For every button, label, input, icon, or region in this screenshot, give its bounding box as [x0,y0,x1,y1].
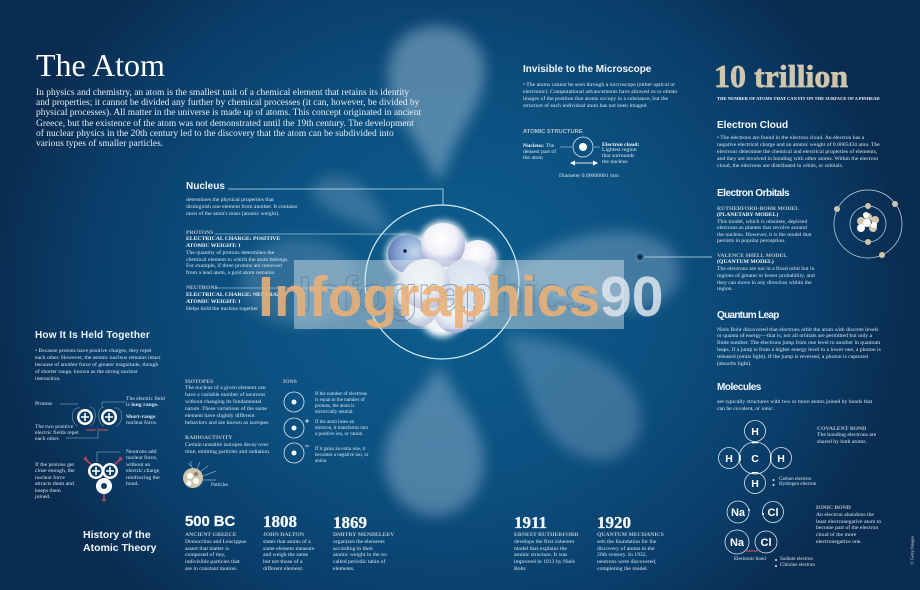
intro text: In physics and chemistry, an atom is the smallest unit of a chemical element that retains its identity [36,88,409,98]
label: neutrons add force: reinforcing the [126,475,160,481]
text: electron cloud: electrons determine the chemical and electrical properties of elements, [717,149,877,155]
description: develops the first coherent [514,539,574,545]
text: neutral atom: If the number of electrons [315,392,367,397]
text: covalent bond [817,426,876,445]
legend: ionic: Chlorine electron [780,563,815,568]
ionic bond diagram: Na [731,507,746,519]
text: invisible to the microscope [523,82,677,109]
electron orbitals diagram [834,190,902,258]
description: composed of tiny, [185,552,226,558]
text: neutrons: NEUTRONS [186,284,218,290]
heading: history: Atomic Theory [83,542,157,554]
description: completing the model. [597,566,648,572]
text: radioactivity: time, emitting particles and radiation. [185,448,270,454]
electron cloud lobes [242,26,680,516]
text: protons: ELECTRICAL CHARGE: POSITIVE [186,236,280,242]
description: ANCIENT GREECE [185,532,237,538]
label: nucleus: Nucleus: The [523,142,554,148]
text: molecules [717,399,872,412]
description: ERNEST RUTHERFORD [514,532,579,538]
heading: ions: IONS [283,378,297,384]
description [185,532,246,572]
label: electron cloud: that surrounds [602,153,634,159]
year: 1920 [597,513,631,532]
text: ionic bond: An electron abandons the [816,512,874,518]
label: particles: Particles [211,482,228,488]
intro text [36,88,422,149]
label: attraction [34,462,75,500]
text: isotopes: nature. These variations of the same [185,406,267,412]
description [597,532,664,572]
label: diameter: Diameter 0.00000001 mm [559,172,619,178]
label: repulsion: each other. [35,436,60,442]
methane covalent bond diagram: H [751,478,759,490]
ion diagrams [284,392,309,463]
legend: covalent [779,476,816,486]
label: neutrons add force: nuclear force, [126,455,157,461]
text: isotopes: The nucleus of a given element can [185,385,266,391]
text: nucleus: determines the physical properties that [186,196,274,202]
text: ionic bond: become part of the electron [816,525,878,531]
description: atomic structure. It was [514,552,567,558]
text: covalent bond: COVALENT BOND [817,426,866,432]
label: repulsion: electric fields repel [35,430,79,436]
year: 1808 [263,512,297,531]
text: molecules: are typically structures with two or more atoms joined by bonds that [717,399,872,405]
atomic structure diagram [560,137,600,166]
label: attraction: joined. [35,494,51,500]
text: neutrons: Helps hold the nucleus together [186,306,258,312]
label: nucleus [523,142,556,161]
label: nucleus: densest part of [523,149,556,155]
year: 1911 [514,513,547,532]
heading: atomic structure: ATOMIC STRUCTURE [523,128,583,134]
text: cation: electron, it transforms into [315,426,368,431]
description: but not those of a [263,559,302,565]
description: different element. [263,566,303,572]
text: ionic bond: least electronegative atom to [816,519,881,525]
heading: invisible to the microscope: Invisible to the Microscope [523,64,651,75]
text: planetary model: RUTHERFORD-BOHR MODEL [717,206,799,212]
methane covalent bond diagram [718,420,792,494]
text: anion [315,446,368,464]
description: states that atoms of a [263,539,311,545]
timeline: 1808 [263,512,314,572]
text: protons: The quantity of protons determines the [186,250,274,256]
text: protons [186,230,289,276]
text: isotopes: element have slightly different [185,413,255,419]
label: electron cloud: Electron cloud: [602,142,639,148]
heading: history [83,529,157,554]
label: electric field: The electric field [126,396,165,402]
text: protons: PROTONS [186,230,213,236]
text: radioactivity: Certain unstable isotopes decay over [185,442,268,448]
text: quantum model: they can move in any direction within the [717,280,812,286]
label: nucleus: the atom [523,155,543,161]
description: organizes the elements [333,539,385,545]
label: attraction: keeps them [35,488,61,494]
description [333,532,394,572]
description: and weigh the same [263,552,308,558]
text: how it is held together: because of another force of greater magnitude, though [35,362,158,368]
text: planetary model: electrons as planets that revolve around [717,225,807,231]
label: neutrons add force: electric charge, [126,468,161,474]
heading: electron cloud: Electron Cloud [717,120,788,131]
pointer dot [636,253,644,261]
text: electron cloud: negative electrical charge and an atomic weight of 0.0005434 amu. The [717,142,880,148]
label: attraction: nuclear force [35,475,65,481]
text: isotopes [185,378,270,426]
text: how it is held together: • Because protons have positive charges, they repel [35,348,152,354]
text: isotopes: have a variable number of neutrons [185,392,265,398]
text: protons: ATOMIC WEIGHT: 1 [186,243,241,249]
watermark text: Infographics90 [258,265,663,329]
label: short-range force: nuclear force. [126,420,157,426]
nucleus orbit circle [365,205,519,359]
description: improved in 1913 by Niels [514,559,575,565]
text: quantum leap: leaps. If a jump is from a higher energy level to a lower one, a photon is [717,347,881,353]
intro text: physical processes). All matter in the universe is made up of atoms. This concept originated in ancient [36,108,421,118]
description: discovery of atoms in the [597,546,654,552]
description [263,532,314,572]
big number caption: THE NUMBER OF ATOMS THAT CAN FIT ON THE SURFACE OF A PINHEAD [717,96,880,100]
text: invisible to the microscope: • The atoms cannot be seen through a microscope (either optical or [523,82,675,88]
label: repulsion [35,424,79,442]
text: neutral atom: is equal to the number of [315,398,365,403]
description: DMITRY MENDELEEV [333,532,394,538]
atomic nucleus [386,221,497,337]
label: neutrons add force: without an [126,462,150,468]
heading: nucleus: Nucleus [186,181,225,192]
text: quantum model: (QUANTUM MODEL) [717,259,774,265]
text: electron cloud [717,135,880,169]
text: anion: becomes a negative ion, or [315,453,368,458]
description: are in constant motion. [185,566,237,572]
text: anion: anion. [315,459,327,464]
methane covalent bond diagram: C [751,453,759,465]
text: isotopes: without changing its fundamental [185,399,261,405]
text: how it is held together [35,348,161,382]
text: how it is held together: of shorter range, known as the strong nuclear [35,368,138,374]
text: quantum leap: (absorbs light). [717,361,751,367]
description: according to their [333,546,373,552]
text: covalent bond: The bonding electrons are [817,432,876,438]
text: quantum model: The electrons are not in a fixed orbit but in [717,266,814,272]
text: how it is held together: interaction. [35,376,61,382]
legend: covalent: Carbon electron [779,476,811,482]
heading: history: History of the [83,529,151,541]
strong force diagram [83,452,123,502]
text: anion: If it gains an extra one, it [315,447,365,452]
methane covalent bond diagram: H [751,426,759,438]
text: planetary model [717,206,812,244]
label: attraction: If the protons get [35,462,74,468]
text: protons: chemical element to which the atom belongs. [186,256,289,262]
text: planetary model: This model, which is obsolete, depicted [717,219,807,225]
text: planetary model: persists in popular perception. [717,238,786,244]
proton repulsion diagram [60,402,126,438]
text: planetary model: the nucleus. However, it is the model that [717,232,811,238]
timeline: 1920 [597,513,664,572]
label: neutrons add force [126,448,161,487]
intro text: and properties; it cannot be divided any further by chemical processes (it can, however, be divided by [36,98,419,108]
label: protons: Protons [35,400,52,406]
ionic bond diagram: Cl [760,537,772,549]
description: model that explains the [514,546,567,552]
text: quantum leap: Niels Bohr discovered that electrons orbit the atom with discrete levels [717,326,878,332]
description [514,532,579,572]
methane covalent bond diagram: H [725,453,733,465]
text: neutrons: ELECTRICAL CHARGE: NEUTRAL [186,292,281,298]
text: neutrons: ATOMIC WEIGHT: 1 [186,298,241,304]
label: electric field: is long range. [126,402,158,408]
text: how it is held together: each other. However, the atomic nucleus remains intact [35,354,161,360]
description: assert that matter is [185,546,229,552]
text: cation: If the atom loses an [315,420,354,425]
description: indivisible particles that [185,559,240,565]
year: 500 BC [185,514,235,530]
intro text: Greece, but the existence of the atom was not demonstrated until the 19th century. The development [36,119,414,129]
ionic bond diagram [725,501,784,567]
text: electron cloud: • The electrons are found in the electron cloud. An electron has a [717,135,864,141]
timeline: 1869 [333,513,394,572]
label: electronic bond: Electronic bond [734,556,766,562]
text: neutral atom: protons, the atom is [315,404,354,409]
text: planetary model: (PLANETARY MODEL) [717,212,778,218]
legend: covalent: Hydrogen electron [779,482,816,486]
text: quantum leap: finite number. The electrons jump from one level to another in quantum [717,340,880,346]
label: attraction: attracts them and [35,481,74,487]
heading: how it is held together: How It Is Held Together [35,330,150,341]
text: invisible to the microscope: electronic). Computational advancements have allowed us to obtain [523,89,677,95]
label: electric field [126,396,165,408]
legend: ionic: Sodium electron [780,557,813,562]
text: ionic bond [816,505,881,545]
big number: 10 trillion [714,58,848,94]
label: attraction: close enough, the [35,468,75,474]
description: neutrons were discovered, [597,559,657,565]
text: electron cloud: and they are involved in bonding with other atoms. Within the electron [717,156,878,162]
label: repulsion: The two positive [35,424,73,430]
nucleus leader lines [215,189,712,288]
text: isotopes: ISOTOPES [185,378,213,384]
text: quantum model: VALENCE SHELL MODEL [717,252,787,258]
text: quantum model: region. [717,286,733,292]
watermark panel [294,260,624,329]
text: nucleus: distinguish one element from another. It contains [186,204,297,210]
text: protons: from a lead atom, a gold atom remains. [186,270,275,276]
description: elements. [333,566,355,572]
text: quantum leap: released (emits light). If the jump is reversed, a photon is captured [717,354,868,360]
description: Democritus and Leucippus [185,539,246,545]
year: 1869 [333,513,367,532]
text: quantum leap: or quanta of energy—that is, not all orbitals are permitted but only a [717,333,872,339]
label: short-range force [126,414,157,426]
text: cation: a positive ion, or cation. [315,432,363,437]
text: ionic bond: electronegative one. [816,539,862,545]
label: neutrons add force: bond. [126,481,139,487]
text: radioactivity: RADIOACTIVITY [185,434,232,440]
text: ionic bond: cloud of the more [816,532,856,538]
description: atomic weight in the so- [333,552,388,558]
radioactive particle icon [183,461,216,488]
timeline: 500 BC [185,514,246,572]
legend: ionic [780,556,815,568]
text: neutral atom [315,391,367,415]
heading: electron orbitals: Electron Orbitals [717,188,789,199]
text: protons: For example, if three protons are removed [186,263,282,269]
label: electron cloud: Lightest region [602,147,637,153]
text: quantum model: regions of greater or lesser probability, and [717,273,815,279]
description: same element measure [263,546,314,552]
timeline: 1911 [514,513,579,572]
description: sets the foundation for the [597,539,656,545]
text: covalent bond: shared by both atoms. [817,439,867,445]
text: cation [315,419,368,437]
intro text: of nuclear physics in the 20th century led to the discovery that the atom can be subdivided into [36,129,394,139]
text: invisible to the microscope: structure of each individual atom has not been imaged. [523,103,648,109]
text: neutral atom: electrically neutral. [315,410,354,415]
description: JOHN DALTON [263,532,304,538]
text: invisible to the microscope: images of the position that atoms occupy in a substance, but the [523,96,668,102]
text: radioactivity [185,434,270,454]
text: ionic bond: IONIC BOND [816,505,851,511]
label: electron cloud: the nucleus [602,159,628,165]
label: short-range force: Short-range [126,414,155,420]
description: 20th century. In 1932, [597,552,647,558]
heading: molecules: Molecules [717,382,761,393]
text: neutrons [186,284,281,312]
text: quantum leap [717,326,881,367]
methane covalent bond diagram: H [777,453,785,465]
text: nucleus: most of the atom's mass (atomic weight). [186,210,279,216]
text: electron cloud: cloud, the electrons are distributed in orbits, or orbitals. [717,163,843,169]
label: electron cloud [602,142,639,165]
image credit: © Getty Images [910,536,914,564]
text: molecules: can be covalent, or ionic. [717,406,774,412]
intro text: various types of smaller particles. [36,139,163,149]
text: nucleus [186,196,298,216]
ionic bond diagram: Na [730,537,745,549]
ionic bond diagram: Cl [768,507,778,519]
title: The Atom [36,47,165,83]
text: quantum model [717,252,815,292]
description: called periodic table of [333,559,385,565]
heading: quantum leap: Quantum Leap [717,310,779,321]
description: Bohr. [514,566,526,572]
label: neutrons add force: Neutrons add [126,448,156,454]
description: QUANTUM MECHANICS [597,532,664,538]
text: isotopes: behaviors and are known as isotopes. [185,420,270,426]
